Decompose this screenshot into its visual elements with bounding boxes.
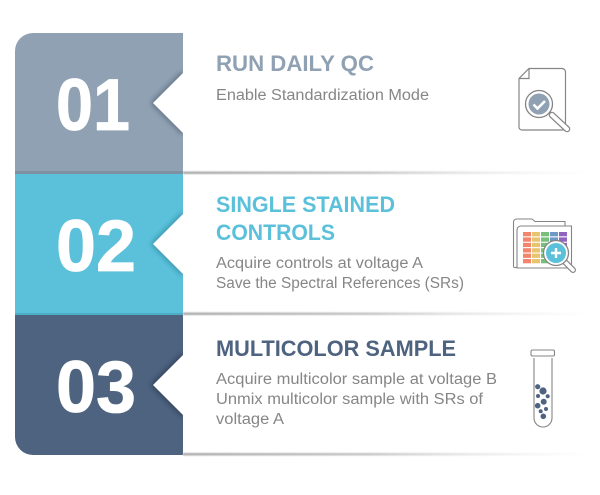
heading: single stained controls: CONTROLS bbox=[216, 220, 335, 245]
text block: step 2 bbox=[216, 192, 464, 292]
description: step 3: voltage A bbox=[216, 411, 285, 428]
description: step 2: Save the Spectral References (SRs) bbox=[216, 275, 464, 292]
description: step 3: Unmix multicolor sample with SRs of bbox=[216, 391, 484, 408]
step 3 number: 03 bbox=[56, 347, 136, 428]
description: step 1: Enable Standardization Mode bbox=[216, 87, 429, 104]
panel: step 3 band bbox=[15, 315, 183, 455]
panel: step 1 band bbox=[15, 33, 183, 174]
particles bbox=[535, 384, 550, 419]
heading: single stained controls: SINGLE STAINED bbox=[216, 192, 395, 217]
heading: single stained controls bbox=[216, 192, 395, 245]
notch: step 2 bbox=[150, 212, 183, 276]
divider shadows bbox=[183, 172, 600, 456]
description: step 3 bbox=[216, 371, 497, 428]
icon: document with magnifier and check bbox=[519, 68, 567, 130]
step 1 number: 01 bbox=[56, 65, 130, 146]
panel: step 2 band bbox=[15, 174, 183, 315]
band bottom shadows bbox=[15, 171, 183, 315]
description: step 3: Acquire multicolor sample at voltage B bbox=[216, 371, 497, 388]
description: step 2 bbox=[216, 255, 464, 292]
text block: step 3 bbox=[216, 336, 497, 428]
heading: multicolor sample: MULTICOLOR SAMPLE bbox=[216, 336, 456, 361]
icon: spectral folder with magnifier bbox=[514, 219, 573, 270]
description: step 2: Acquire controls at voltage A bbox=[216, 255, 424, 272]
notch: step 3 bbox=[150, 353, 183, 416]
heading: run daily qc: RUN DAILY QC bbox=[216, 51, 374, 76]
text block: step 1 bbox=[216, 51, 429, 104]
step 2 number: 02 bbox=[56, 206, 136, 287]
notch: step 1 bbox=[150, 70, 183, 135]
icon: test tube with particles bbox=[531, 350, 554, 427]
magnifier with plus bbox=[544, 240, 573, 270]
spectral colour grid bbox=[523, 232, 567, 263]
